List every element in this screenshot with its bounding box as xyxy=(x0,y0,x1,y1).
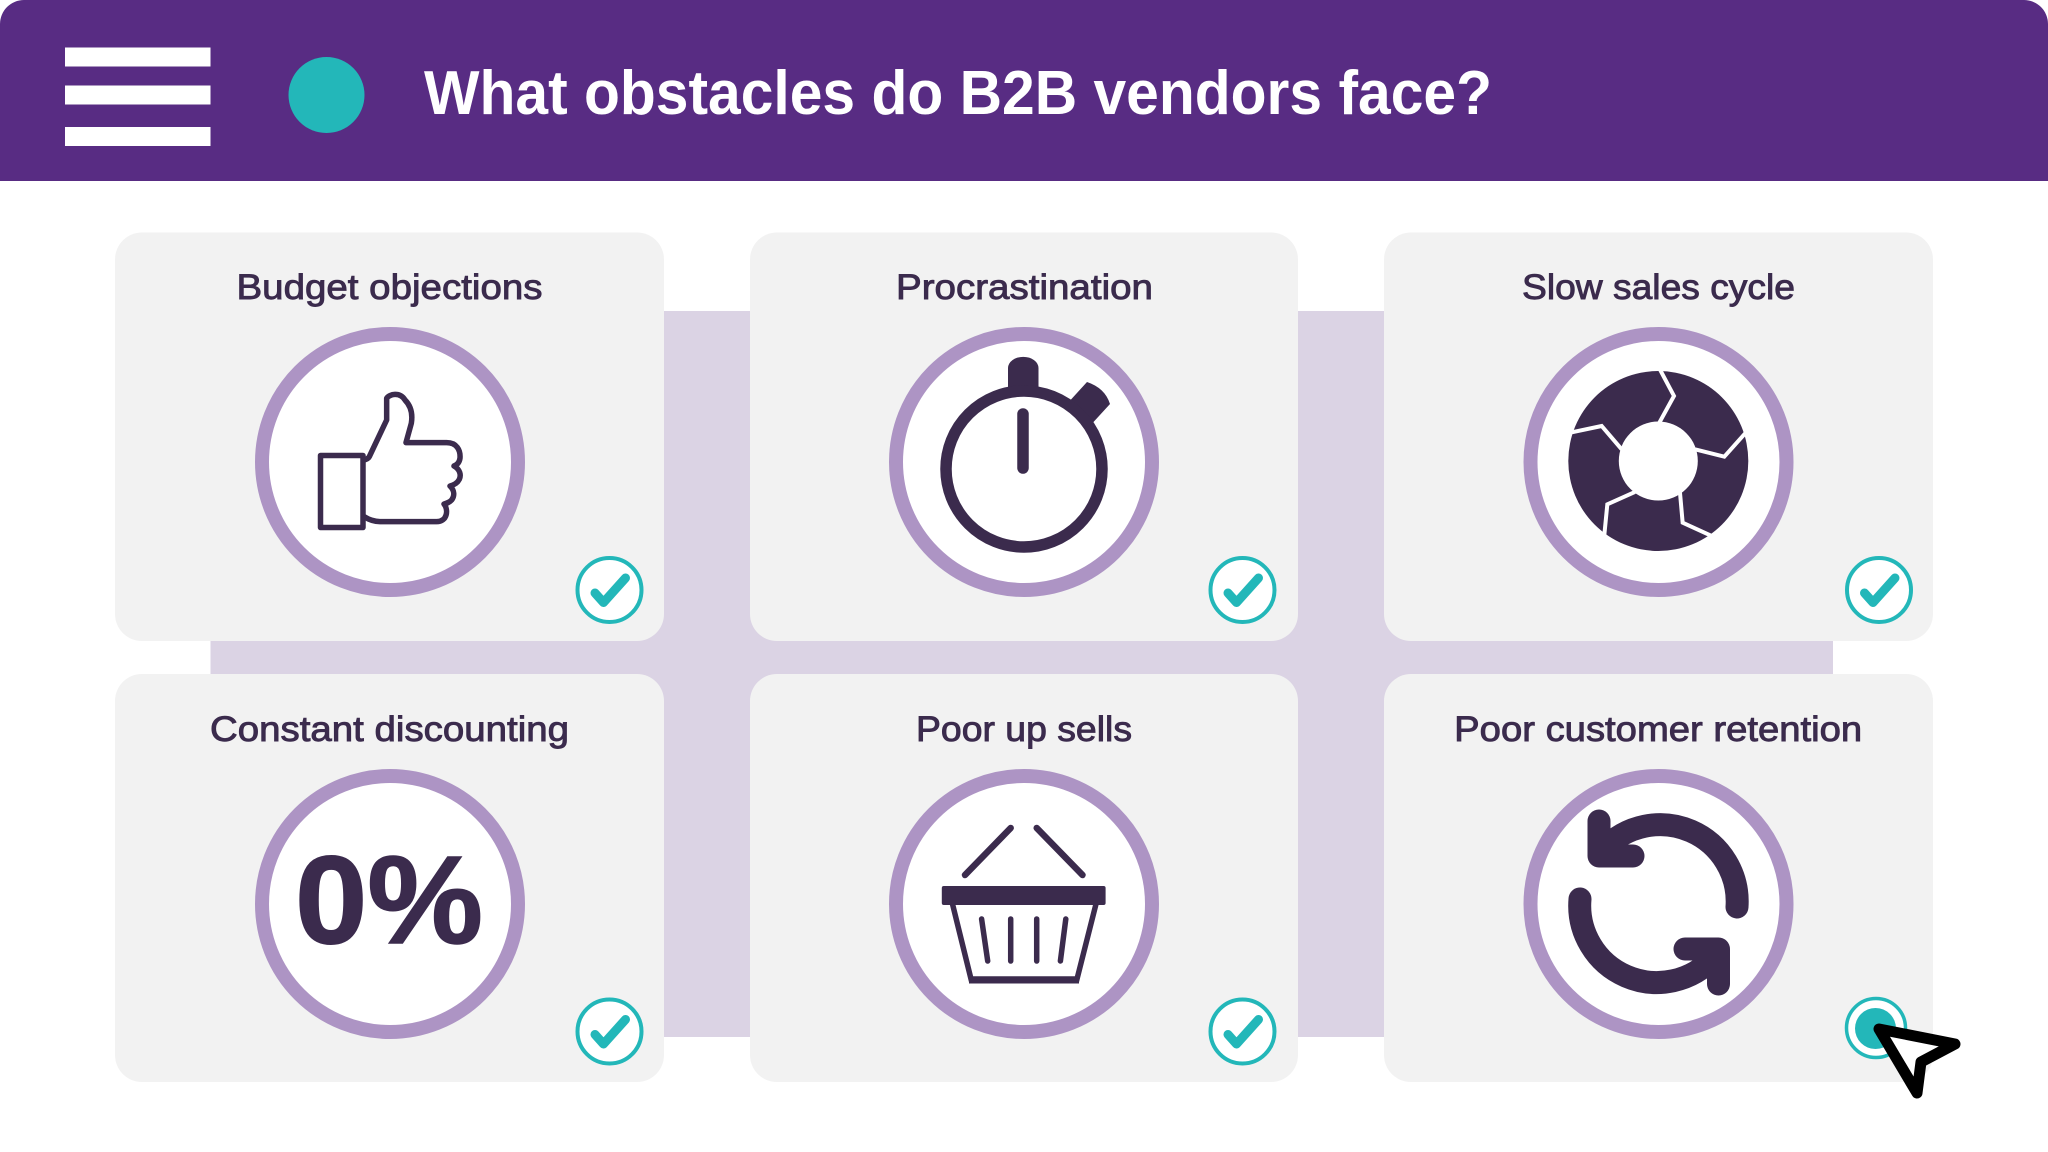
check badge xyxy=(578,558,642,622)
panel: procrastination xyxy=(750,232,1298,641)
icon circle: thumbs up xyxy=(262,334,518,590)
icon circle: stopwatch xyxy=(896,334,1152,590)
check badge xyxy=(578,1000,642,1064)
icon: mouse cursor arrow xyxy=(1879,1029,1955,1093)
panel: slow sales cycle xyxy=(1384,232,1933,641)
icon circle: zero percent xyxy=(262,776,518,1032)
title: What obstacles do B2B vendors face? xyxy=(424,59,1492,128)
icon: teal dot xyxy=(288,57,364,133)
active selection dot xyxy=(1846,998,1906,1058)
check badge xyxy=(1210,1000,1274,1064)
icon circle: basket xyxy=(896,776,1152,1032)
heading: poor up sells: Poor up sells xyxy=(916,709,1132,749)
icon circle: zero percent: 0% xyxy=(295,831,483,970)
icon circle: refresh arrows xyxy=(1530,776,1786,1032)
header bar xyxy=(0,0,2048,181)
heading: poor customer retention: Poor customer retention xyxy=(1454,709,1862,749)
panel: constant discounting xyxy=(115,674,664,1082)
heading: budget objections: Budget objections xyxy=(236,267,542,307)
panel: poor up sells xyxy=(750,674,1298,1082)
heading: procrastination: Procrastination xyxy=(896,267,1153,307)
panel: poor customer retention xyxy=(1384,674,1933,1082)
check badge xyxy=(1210,558,1274,622)
check badge xyxy=(1847,558,1911,622)
lavender backdrop xyxy=(210,311,1833,1037)
heading: slow sales cycle: Slow sales cycle xyxy=(1522,267,1795,307)
heading: constant discounting: Constant discounting xyxy=(210,709,569,749)
icon: hamburger menu xyxy=(65,48,210,146)
panel: budget objections xyxy=(115,232,664,641)
icon circle: cycle wheel xyxy=(1530,334,1786,590)
